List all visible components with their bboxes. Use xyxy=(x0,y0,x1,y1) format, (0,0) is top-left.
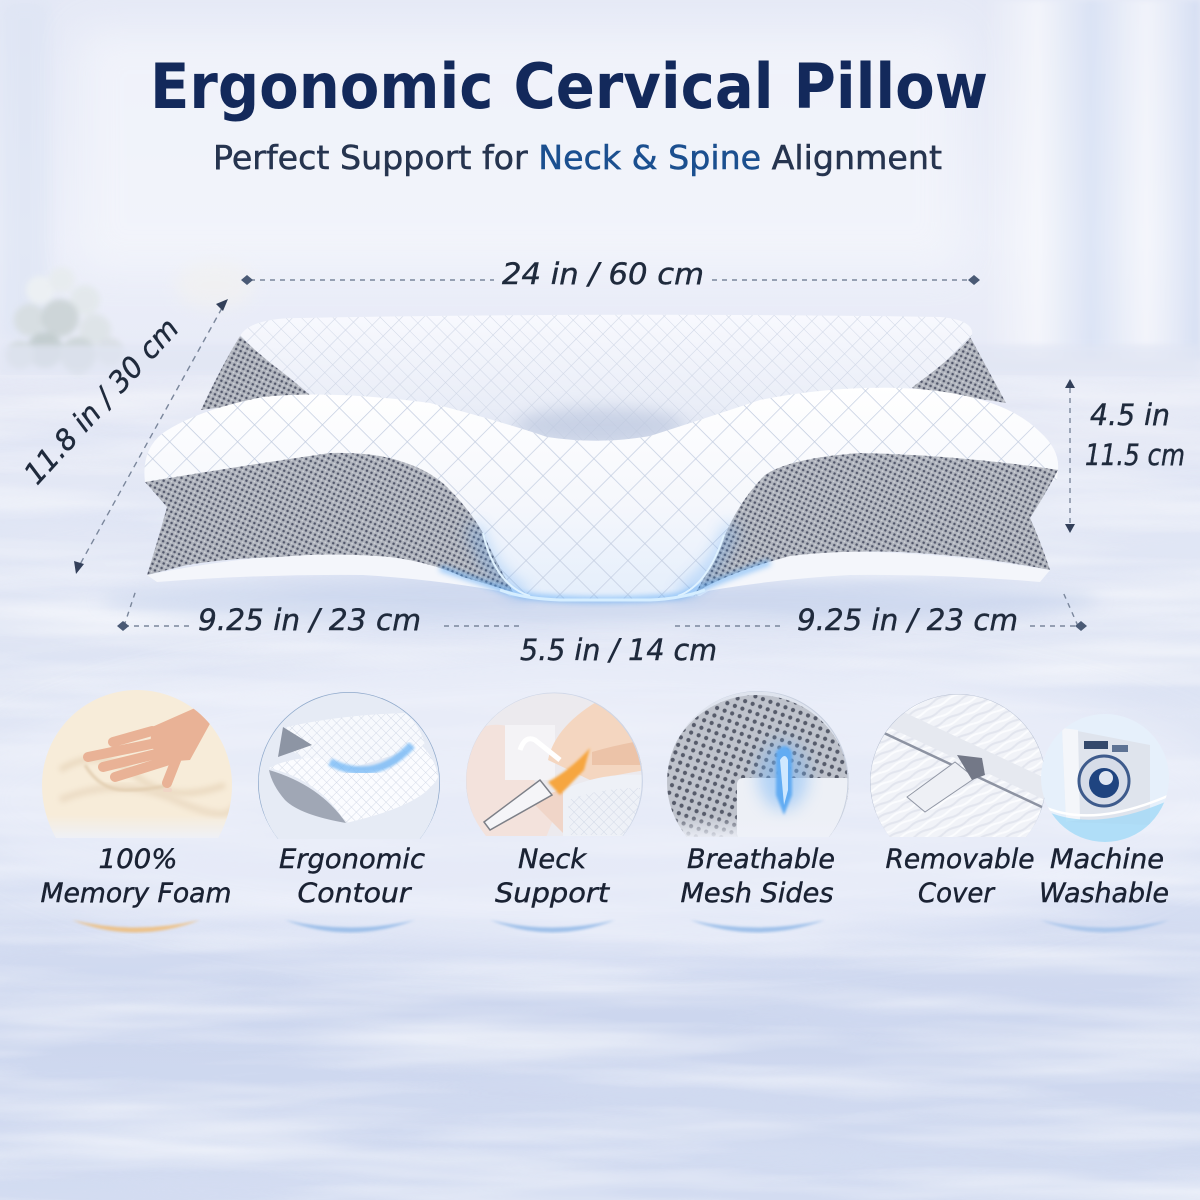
orange arc accent xyxy=(72,920,200,932)
label: Machine Washable: Washable xyxy=(1039,878,1169,909)
dimension: right wing 9.25 in: 9.25 in / 23 cm xyxy=(797,603,1018,637)
feature: machine washable xyxy=(1039,714,1170,932)
icon: hand on foam xyxy=(40,688,235,840)
label: Removable Cover: Removable xyxy=(886,844,1034,875)
pillow rear quilted top xyxy=(240,315,972,470)
subtitle: Perfect Support for Neck & Spine Alignment xyxy=(213,138,942,177)
icon: pillow mini xyxy=(269,713,438,823)
label: Removable Cover: Cover xyxy=(918,878,996,909)
feature: breathable mesh xyxy=(665,690,855,932)
pillow rear grey mesh corners xyxy=(201,333,1006,410)
feature: removable cover xyxy=(868,690,1048,909)
pillow underside right strip xyxy=(680,551,1050,596)
dimension: left wing 9.25 in xyxy=(117,590,520,637)
dimension: depth 11.8 in: 11.8 in / 30 cm xyxy=(17,311,185,491)
label: Machine Washable: Machine xyxy=(1050,844,1164,875)
dimension: right wing 9.25 in xyxy=(675,592,1087,637)
pillow right grey mesh side xyxy=(696,453,1058,592)
dimension: left wing 9.25 in: 9.25 in / 23 cm xyxy=(198,603,421,637)
label: 100% Memory Foam: Memory Foam xyxy=(40,878,232,909)
dimension: height 4.5 in xyxy=(1065,379,1185,533)
dimension: centre 5.5 in: 5.5 in / 14 cm xyxy=(520,633,717,667)
blue arc accent xyxy=(690,920,825,932)
pillow left grey mesh side xyxy=(145,453,513,592)
feature: neck support xyxy=(464,690,646,932)
label: Breathable Mesh Sides: Breathable xyxy=(687,844,835,875)
pillow illustration xyxy=(144,315,1058,600)
icon: zipper on towel fabric xyxy=(868,690,1048,840)
feature: memory foam xyxy=(40,688,235,932)
label: Ergonomic Contour: Contour xyxy=(298,878,412,909)
label: Neck Support: Support xyxy=(495,878,611,909)
dimension: depth 11.8 in xyxy=(17,299,228,574)
feature: ergonomic contour xyxy=(255,690,445,932)
dimension: width 24 in: 24 in / 60 cm xyxy=(502,257,704,291)
label: Ergonomic Contour: Ergonomic xyxy=(279,844,425,875)
label: Neck Support: Neck xyxy=(518,844,587,875)
blue arc accent xyxy=(285,920,415,932)
dimension: height 4.5 in: 11.5 cm xyxy=(1085,438,1185,472)
pillow front quilted body xyxy=(144,388,1058,600)
label: 100% Memory Foam: 100% xyxy=(98,844,178,875)
blue glow contour line xyxy=(440,525,770,600)
dimension: width 24 in xyxy=(241,257,980,291)
title: Ergonomic Cervical Pillow xyxy=(150,50,988,123)
dimension: height 4.5 in: 4.5 in xyxy=(1090,398,1170,432)
icon: neck and shoulder xyxy=(464,690,646,840)
icon: mesh with airflow xyxy=(667,692,849,837)
label: Breathable Mesh Sides: Mesh Sides xyxy=(680,878,834,909)
icon: washing machine xyxy=(1041,728,1166,842)
blue arc accent xyxy=(1040,920,1170,932)
pillow underside left strip xyxy=(147,554,525,596)
blue arc accent xyxy=(490,920,615,932)
